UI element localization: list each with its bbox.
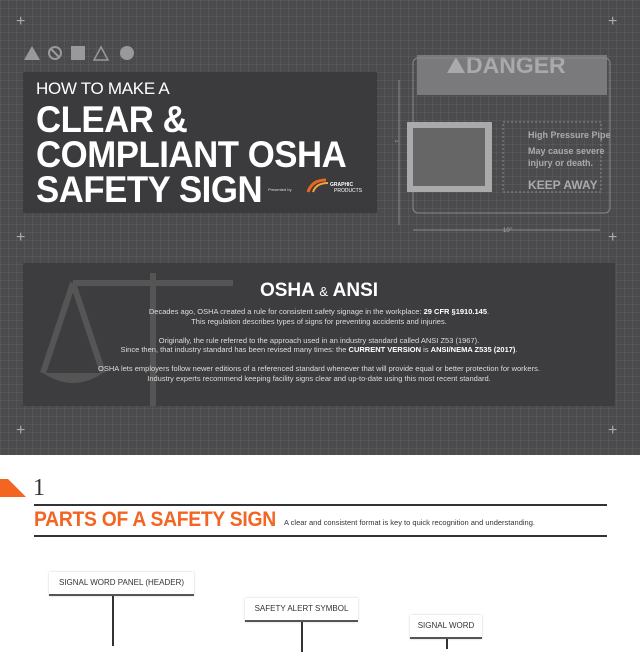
label: signal word: SIGNAL WORD (418, 621, 474, 630)
logo (306, 178, 363, 194)
panel: OSHA & ANSI (23, 263, 615, 406)
sign blueprint: May cause severe (528, 146, 605, 156)
panel: OSHA & ANSI: Originally, the rule referred to the approach used in an industry standard called ANSI Z53 (1967). (159, 336, 479, 344)
icon: scales (40, 273, 233, 406)
panel: OSHA & ANSI: Industry experts recommend keeping facility signs clear and up-to-date using this most recent standard. (147, 374, 491, 382)
title box: COMPLIANT OSHA (36, 134, 346, 175)
sign blueprint: injury or death. (528, 158, 593, 168)
heading: Parts of a safety sign (34, 508, 535, 531)
title box: SAFETY SIGN (36, 169, 262, 210)
dark header background: + (608, 229, 617, 246)
dark header background (0, 0, 640, 455)
sign blueprint (395, 52, 611, 234)
section number 1 (0, 475, 45, 501)
heading: Parts of a safety sign: A clear and consistent format is key to quick recognition and understanding. (284, 518, 535, 527)
dark header background: + (16, 229, 25, 246)
panel: OSHA & ANSI: OSHA & ANSI (260, 280, 378, 301)
panel: OSHA & ANSI: OSHA lets employers follow newer editions of a referenced standard whenever that will provide equal or better protection for workers. (98, 364, 540, 373)
section number 1: 1 (33, 475, 45, 501)
heading: Parts of a safety sign: PARTS OF A SAFETY SIGN (34, 508, 276, 531)
dark header background: + (608, 13, 617, 30)
panel: OSHA & ANSI: Since then, that industry standard has been revised many times: the CURRENT VERSION is ANSI/NEMA Z535 (2017). (120, 345, 518, 354)
panel: OSHA & ANSI: This regulation describes types of signs for preventing accidents and injuries. (191, 316, 447, 326)
logo: PRODUCTS (334, 188, 363, 194)
icons: sign shapes (24, 46, 134, 61)
title box (23, 72, 377, 213)
sign blueprint: 10" (503, 228, 512, 234)
sign blueprint: DANGER (466, 52, 566, 78)
dark header background: + (16, 13, 25, 30)
sign blueprint: KEEP AWAY (528, 178, 598, 192)
dark header background: + (608, 422, 617, 439)
logo: GRAPHIC (330, 182, 353, 188)
dark header background: + (16, 422, 25, 439)
label: safety alert symbol: SAFETY ALERT SYMBOL (255, 604, 348, 613)
title box: Presented by (268, 187, 292, 192)
title box: CLEAR & (36, 99, 187, 140)
label: signal word panel: SIGNAL WORD PANEL (HEADER) (59, 578, 184, 587)
sign blueprint: High Pressure Pipe (528, 130, 611, 140)
title box: HOW TO MAKE A (36, 79, 169, 98)
panel: OSHA & ANSI: Decades ago, OSHA created a rule for consistent safety signage in the workplace: 29 CFR §1910.145. (149, 307, 489, 316)
